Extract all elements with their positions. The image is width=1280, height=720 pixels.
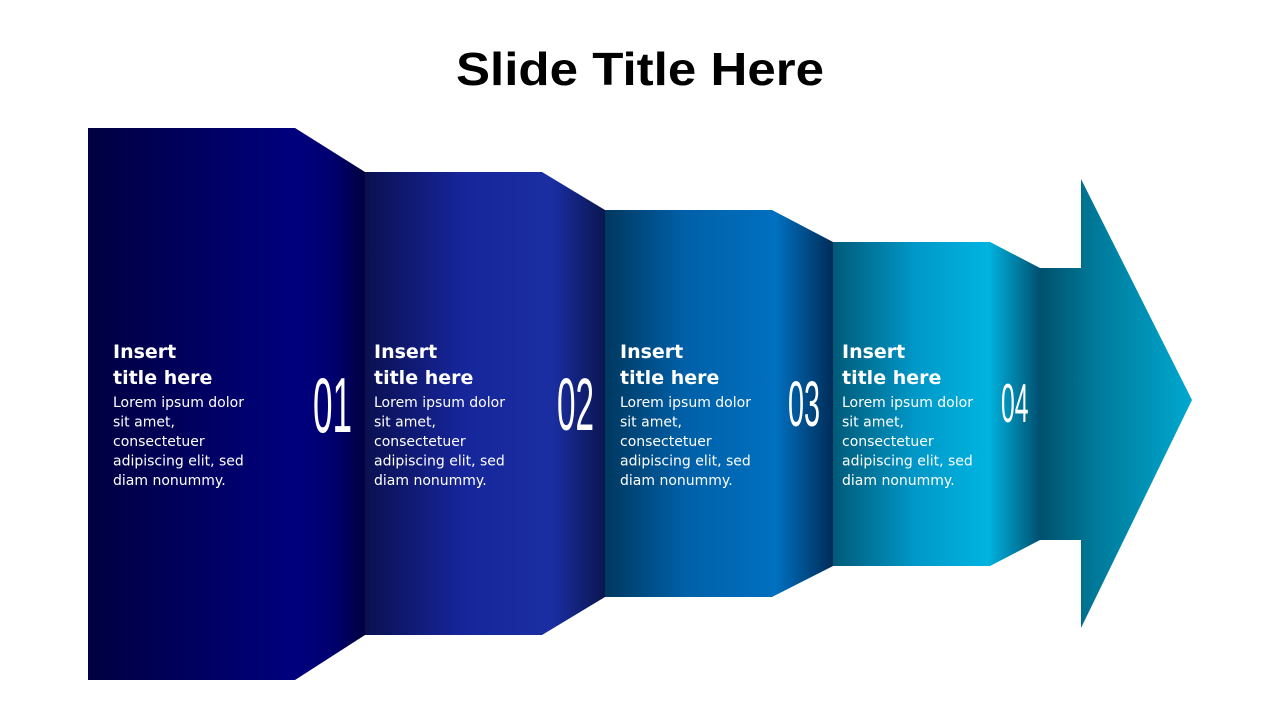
step 3 body: consectetuer <box>620 434 712 450</box>
step 2 body: diam nonummy. <box>374 473 487 489</box>
step 2 body: adipiscing elit, sed <box>374 454 505 470</box>
panel: step 3 <box>605 210 833 597</box>
panel: step 4 <box>833 242 1040 566</box>
step 2 body: sit amet, <box>374 414 436 430</box>
step 2 heading: Insert <box>374 341 437 363</box>
step 1 body: sit amet, <box>113 414 175 430</box>
step 2 number: 02 <box>557 364 594 447</box>
step 3 body: Lorem ipsum dolor <box>620 395 751 411</box>
step 3 heading: title here <box>620 367 719 389</box>
step 4 body: sit amet, <box>842 414 904 430</box>
step 4 number: 04 <box>1001 373 1029 435</box>
step 4 body: Lorem ipsum dolor <box>842 395 973 411</box>
step 4 body: diam nonummy. <box>842 473 955 489</box>
panel: step 1 <box>88 128 365 680</box>
step 1 body: diam nonummy. <box>113 473 226 489</box>
step 4 body: consectetuer <box>842 434 934 450</box>
step 4 heading: title here <box>842 367 941 389</box>
step 3 number: 03 <box>788 368 820 440</box>
step 2 body: Lorem ipsum dolor <box>374 395 505 411</box>
step 3 body: adipiscing elit, sed <box>620 454 751 470</box>
step 4 heading: Insert <box>842 341 905 363</box>
arrow head <box>1040 179 1192 628</box>
step 1 body: Lorem ipsum dolor <box>113 395 244 411</box>
title: Slide Title Here <box>456 43 824 95</box>
step 3 heading: Insert <box>620 341 683 363</box>
step 2 body: consectetuer <box>374 434 466 450</box>
step 1 heading: title here <box>113 367 212 389</box>
step 2 heading: title here <box>374 367 473 389</box>
step 1 body: consectetuer <box>113 434 205 450</box>
step 1 heading: Insert <box>113 341 176 363</box>
step 1 body: adipiscing elit, sed <box>113 454 244 470</box>
panel: step 2 <box>365 172 605 635</box>
step 1 number: 01 <box>313 361 352 449</box>
step 3 body: sit amet, <box>620 414 682 430</box>
step 4 body: adipiscing elit, sed <box>842 454 973 470</box>
step 3 body: diam nonummy. <box>620 473 733 489</box>
